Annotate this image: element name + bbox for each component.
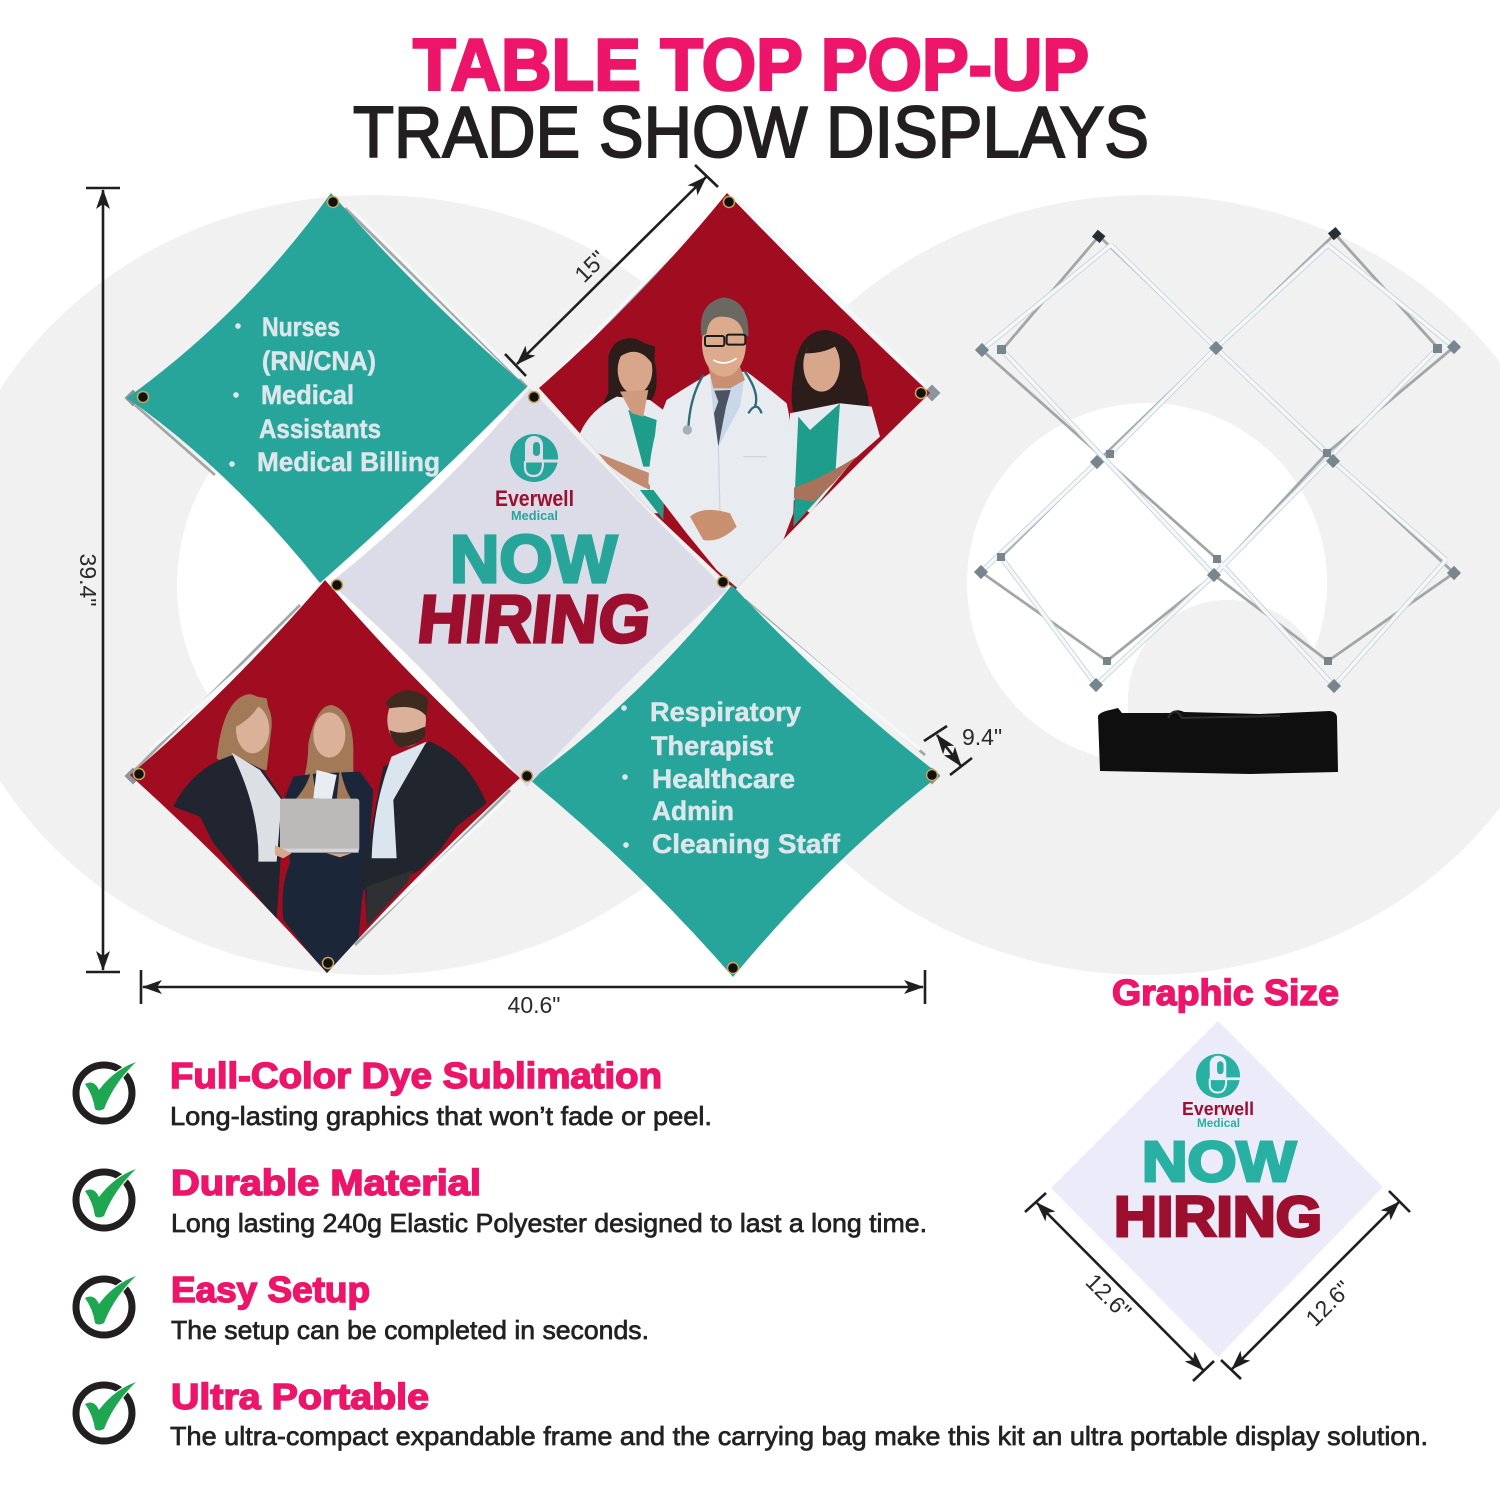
middle woman [275, 705, 373, 975]
feature: ultra portable: Ultra Portable [171, 1376, 429, 1417]
frame edges behind panels [125, 198, 940, 950]
teal panel list text: Respiratory [650, 697, 801, 727]
right nurse [787, 330, 880, 527]
feature: dye sublimation: Long-lasting graphics that won’t fade or peel. [170, 1101, 712, 1131]
title line 1: TABLE TOP POP-UP [413, 25, 1089, 106]
teal panel list text: Nurses [262, 312, 340, 342]
logo: everwell: Medical [511, 508, 558, 523]
photo: office staff [173, 690, 487, 975]
hiring heading small: HIRING [1114, 1185, 1322, 1249]
dimension: height 39.4 [75, 188, 120, 972]
teal panel list text: Healthcare [652, 764, 795, 794]
logo: everwell: Everwell [495, 486, 574, 511]
icon: check [76, 1382, 136, 1441]
panel: teal bottom-right [530, 585, 940, 977]
logo: everwell [495, 434, 574, 523]
dimension: right side 12.6 [1221, 1191, 1410, 1379]
icon: check [76, 1169, 136, 1228]
feature: easy setup: Easy Setup [171, 1269, 370, 1310]
hiring heading: HIRING [414, 582, 654, 657]
panel: red bottom-left with office staff [130, 580, 520, 975]
dimension: depth 9.4: 9.4" [962, 724, 1002, 750]
dimension: left side 12.6: 12.6" [1081, 1268, 1137, 1324]
logo: everwell small [1182, 1054, 1254, 1130]
feature: dye sublimation [76, 1055, 712, 1131]
feature: easy setup [76, 1269, 649, 1345]
dimension: width 40.6: 40.6" [508, 992, 560, 1018]
panel: red top-right with medical staff [539, 193, 930, 593]
frame hubs [974, 227, 1461, 693]
icon: check [76, 1062, 136, 1121]
feature: durable material [76, 1162, 927, 1238]
frame grey bars [981, 234, 1454, 661]
frame white bars [981, 245, 1454, 686]
panel: center now hiring [330, 388, 727, 787]
feature: ultra portable [76, 1376, 1428, 1451]
teal panel list text: Therapist [651, 731, 773, 761]
dimension: height 39.4: 39.4" [75, 554, 101, 606]
dimension: depth 9.4 [924, 724, 1002, 775]
background rings [0, 195, 1500, 975]
feature: ultra portable: The ultra-compact expandable frame and the carrying bag make this kit an ultra portable display solution. [170, 1421, 1428, 1451]
teal panel list text: Assistants [259, 414, 381, 444]
feature list [76, 1055, 1428, 1451]
dimension: left side 12.6 [1025, 1193, 1214, 1381]
title line 2: TRADE SHOW DISPLAYS [353, 93, 1149, 173]
dimension: width 40.6 [141, 970, 925, 1018]
now heading small: NOW [1142, 1130, 1296, 1194]
logo: everwell small: Everwell [1182, 1099, 1254, 1119]
graphic size heading: Graphic Size [1112, 972, 1339, 1013]
panel: display with graphics [125, 193, 940, 977]
man [358, 690, 487, 927]
left nurse [580, 338, 663, 520]
photo: medical staff [580, 297, 880, 593]
teal panel list text: Admin [652, 796, 734, 826]
now heading: NOW [450, 522, 618, 597]
panel: teal top-left [127, 193, 527, 583]
left woman [173, 694, 283, 920]
teal panel list text [621, 697, 841, 859]
icon: check [76, 1276, 136, 1335]
feature: dye sublimation: Full-Color Dye Sublimation [170, 1055, 662, 1096]
logo: everwell small: Medical [1197, 1116, 1240, 1130]
dimension: panel side 15: 15" [569, 245, 611, 287]
doctor [648, 297, 794, 593]
teal panel list text: (RN/CNA) [262, 346, 376, 376]
teal panel list text: Medical [261, 380, 354, 410]
panel: collapsible frame [974, 227, 1461, 693]
dimension: panel side 15 [505, 165, 718, 376]
feature: easy setup: The setup can be completed in seconds. [171, 1315, 649, 1345]
feature: durable material: Long lasting 240g Elastic Polyester designed to last a long time. [171, 1208, 927, 1238]
panel: graphic size diagram [1025, 1021, 1410, 1381]
title [353, 25, 1149, 173]
feature: durable material: Durable Material [171, 1162, 481, 1203]
teal panel list text: Medical Billing [257, 447, 440, 477]
icon: carrying bag [1098, 708, 1338, 774]
teal panel list text: Cleaning Staff [652, 829, 841, 859]
teal panel list text [229, 312, 440, 477]
dimension: right side 12.6: 12.6" [1300, 1275, 1356, 1331]
grommets [134, 196, 938, 974]
